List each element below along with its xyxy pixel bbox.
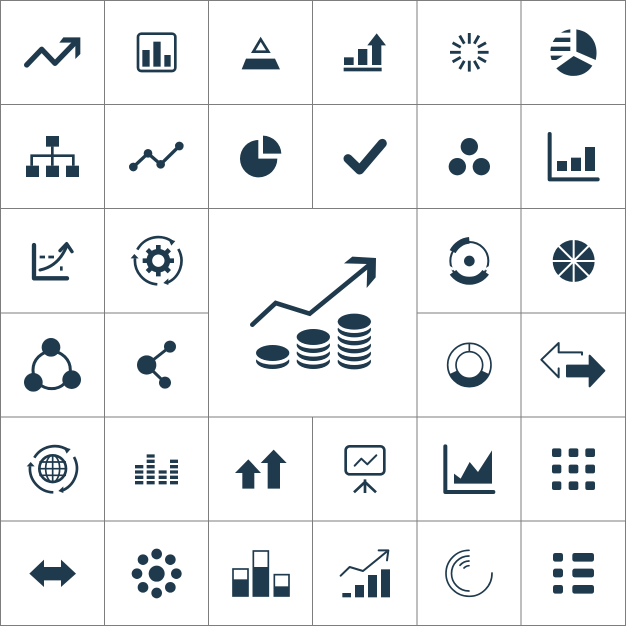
icon: check mark	[348, 143, 382, 170]
icon: line chart with nodes	[129, 142, 184, 171]
icon: growth curve chart	[34, 244, 72, 278]
icon: three circles	[449, 138, 490, 175]
icon: central growth arrow over coin stacks	[252, 257, 376, 369]
icon: left and right arrows	[541, 343, 604, 386]
icon: organization chart	[26, 136, 79, 177]
icon: list	[553, 553, 594, 594]
icon: three by three dots	[552, 448, 595, 490]
icon: donut chart	[448, 343, 491, 387]
icon: presentation board	[346, 446, 384, 493]
coin stack small	[255, 345, 290, 369]
icon: connected circle network	[24, 338, 81, 392]
icon: concentric arcs radar	[446, 550, 492, 596]
icon: pie chart with slice out	[240, 136, 281, 177]
icon: gear with cycle arrows	[131, 237, 181, 285]
icon: two up arrows	[235, 450, 287, 489]
icon: rising trend arrow	[27, 37, 80, 65]
icon: axis bar chart	[550, 134, 598, 179]
growth arrow	[252, 257, 376, 325]
icon: segmented wheel	[551, 238, 596, 284]
icon: bars with trend arrow	[341, 550, 390, 597]
icon: ring with segments and dot	[449, 240, 490, 281]
icon: striped pie chart	[546, 28, 597, 76]
icon: circle of dots	[132, 549, 182, 598]
icon: share nodes	[137, 341, 176, 389]
icon: double horizontal arrow	[29, 560, 76, 587]
icon: pyramid	[242, 39, 280, 69]
coin stack medium	[296, 329, 331, 369]
icon: bars with up arrow	[344, 33, 386, 71]
icon: equalizer	[135, 454, 178, 484]
icon: filled level bars	[233, 551, 289, 596]
icon: bar chart in frame	[138, 34, 175, 71]
icon: loading spinner	[450, 33, 489, 72]
icon: area chart	[445, 446, 493, 492]
icon: globe with cycle arrows	[27, 446, 77, 493]
coin stack tall	[337, 314, 372, 369]
